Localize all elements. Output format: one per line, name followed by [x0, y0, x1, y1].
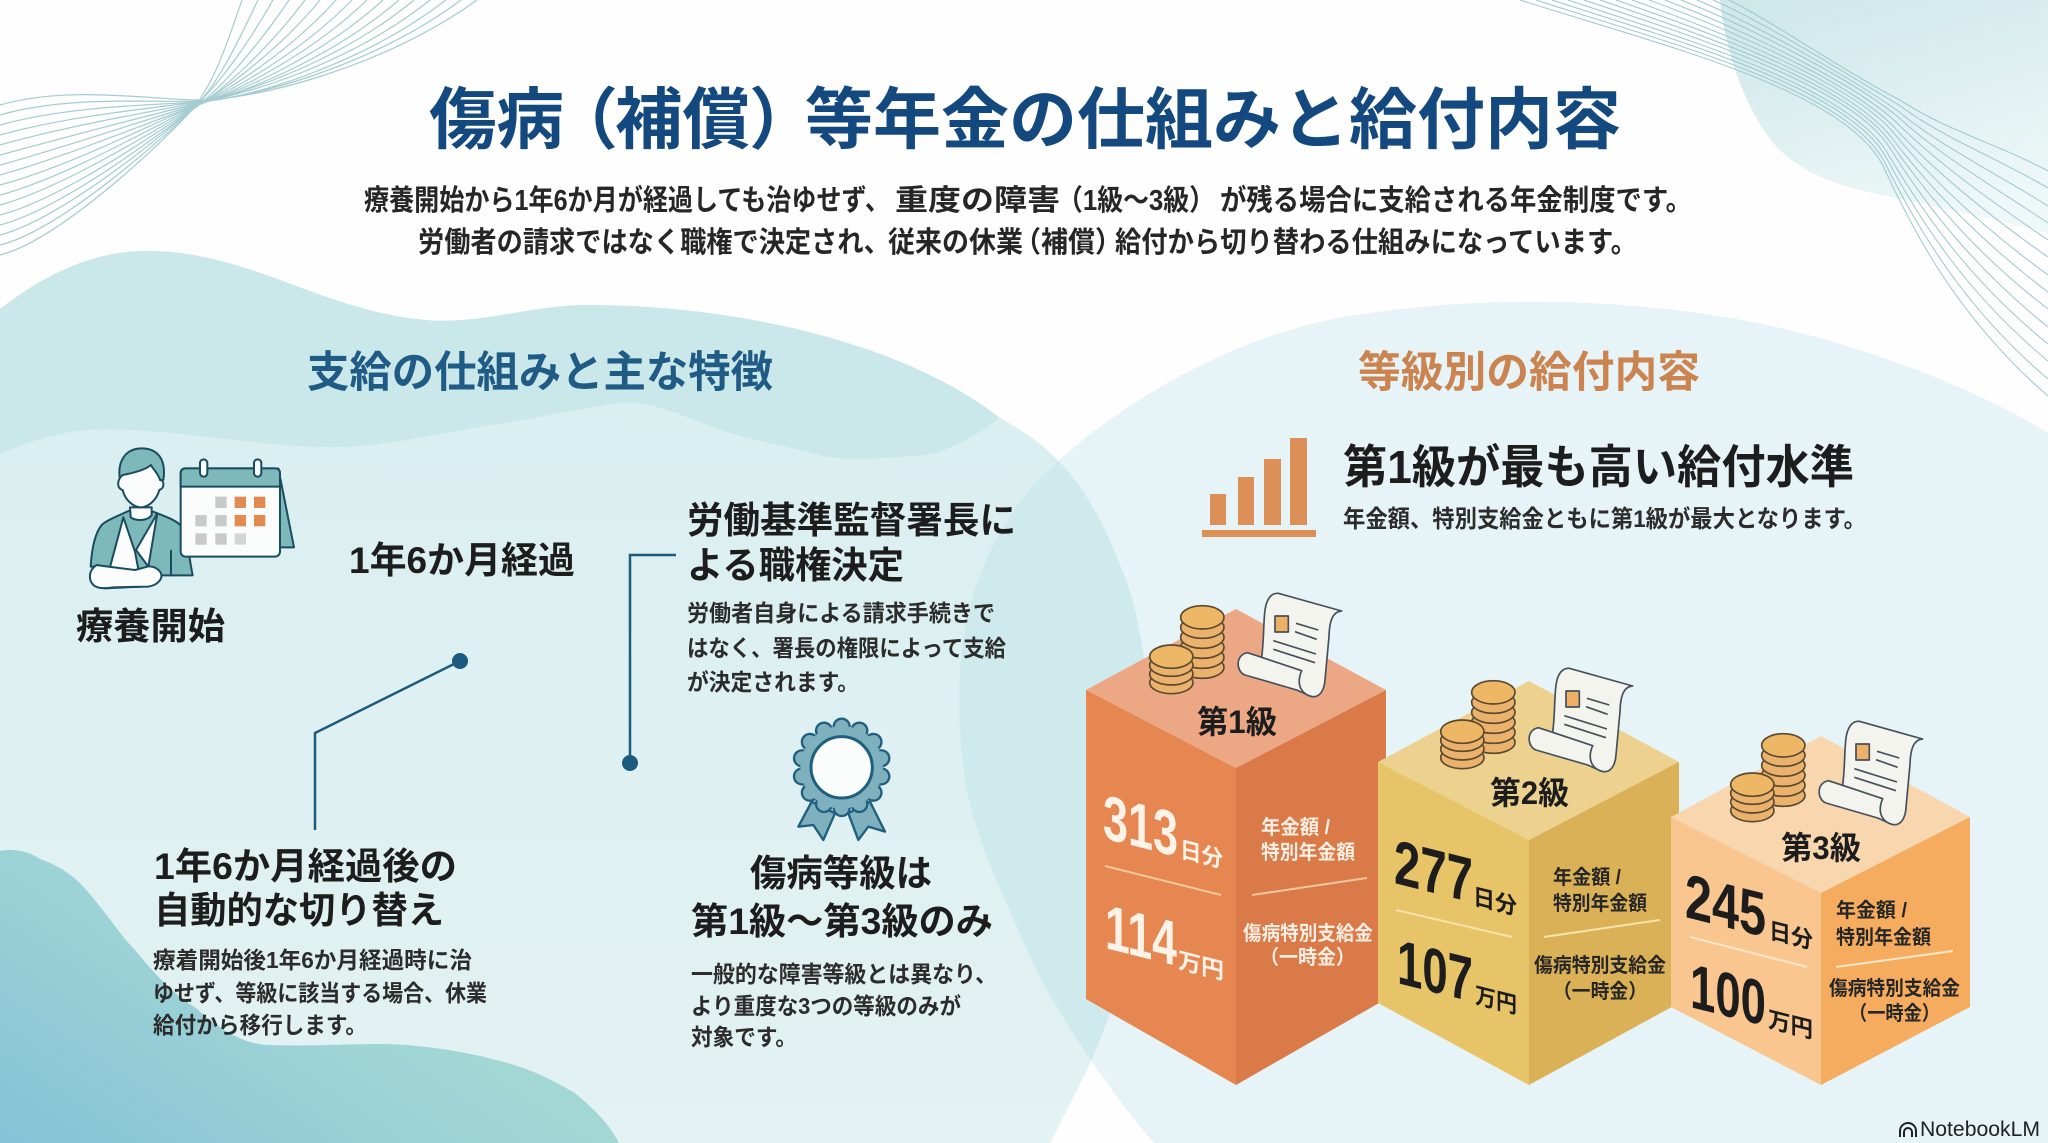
- text block: grades 1 to 3 only: 対象です。: [691, 1024, 797, 1050]
- title: 等年金の仕組みと給付内容: [805, 83, 1621, 158]
- block: grade 3: 第3級: [1781, 830, 1861, 866]
- block: grade 2: 277: [1394, 826, 1473, 917]
- block: grade 2: 年金額 /: [1553, 866, 1621, 889]
- block: grade 1: 第1級: [1197, 704, 1277, 740]
- text block: grades 1 to 3 only: 傷病等級は: [750, 853, 932, 894]
- block: grade 1: 日分: [1180, 836, 1224, 873]
- block: grade 3: 傷病特別支給金: [1829, 977, 1960, 1000]
- block: grade 1: 313: [1103, 781, 1178, 871]
- block: grade 3: 100: [1690, 950, 1766, 1040]
- intro text: 療養開始から1年6か月が経過しても治ゆせず、: [364, 183, 890, 217]
- block: grade 2: 第2級: [1490, 775, 1569, 811]
- intro text: （1級～3級）: [1057, 184, 1215, 217]
- icon: coins and document grade 2: [1441, 668, 1633, 772]
- label: 1 year 6 months elapsed: 1年6か月経過: [349, 540, 575, 581]
- text block: decision by chief of labour standards office: [687, 500, 1016, 695]
- icon: bar chart: [1202, 438, 1316, 537]
- text block: automatic switch: 1年6か月経過後の: [154, 846, 457, 887]
- block: grade 2: 日分: [1473, 883, 1518, 920]
- block: grade 1: 特別年金額: [1261, 841, 1355, 864]
- icon: award ribbon: [792, 719, 891, 840]
- label: start of treatment: 療養開始: [76, 606, 225, 647]
- block: grade 1: 年金額 /: [1261, 816, 1330, 839]
- icon: injured person with sling: [90, 448, 193, 588]
- block: grade 3: 万円: [1768, 1006, 1813, 1043]
- block: grade 2: 特別年金額: [1553, 892, 1647, 915]
- background: top-right wave lines: [1520, 0, 2048, 396]
- block: grade 3: 年金額 /: [1836, 899, 1907, 922]
- panel: right background circle: [959, 302, 2048, 1143]
- panel: upper darker wave band: [0, 251, 1000, 459]
- panel: overlap lens of left and right shapes: [960, 461, 1144, 1060]
- intro text: 重度の障害: [895, 184, 1060, 217]
- panel: left background shape: [0, 251, 1151, 1143]
- background: top-right teal shape: [1720, 0, 2048, 233]
- panel: lower-left teal shape: [0, 850, 619, 1143]
- intro text: が残る場合に支給される年金制度です。: [1220, 183, 1692, 217]
- block: grade 3: [1671, 721, 1970, 1085]
- icon: coins and document grade 3: [1731, 721, 1923, 825]
- text block: automatic switch: 給付から移行します。: [153, 1012, 367, 1038]
- connector: to automatic switch: [315, 653, 468, 830]
- intro text: 給付から切り替わる仕組みになっています。: [1115, 226, 1637, 259]
- logo: NotebookLM: NotebookLM: [1920, 1118, 2040, 1141]
- text block: decision by chief of labour standards office: が決定されます。: [687, 669, 859, 695]
- text block: automatic switch: ゆせず、等級に該当する場合、休業: [153, 980, 487, 1006]
- text block: automatic switch: 自動的な切り替え: [154, 890, 444, 931]
- block: grade 1: 傷病特別支給金: [1243, 922, 1373, 945]
- block: grade 2: （一時金）: [1553, 980, 1647, 1003]
- block: grade 2: 107: [1397, 926, 1473, 1016]
- block: grade 1: 114: [1105, 891, 1177, 980]
- title: ）: [749, 83, 816, 158]
- block: grade 1: [1086, 593, 1386, 1085]
- text block: grades 1 to 3 only: 第1級～第3級のみ: [691, 901, 993, 942]
- heading: left section: 支給の仕組みと主な特徴: [307, 349, 773, 397]
- block: grade 1: 万円: [1178, 947, 1224, 984]
- callout: grade 1 is highest: 年金額、特別支給金ともに第1級が最大となります。: [1343, 505, 1866, 533]
- text block: decision by chief of labour standards office: はなく、署長の権限によって支給: [687, 635, 1006, 661]
- title: 傷病: [429, 83, 564, 158]
- background: top-left wave lines: [0, 0, 477, 255]
- block: grade 3: 日分: [1769, 917, 1814, 954]
- title: [429, 83, 1621, 158]
- block: grade 2: 万円: [1475, 982, 1517, 1018]
- heading: right section: 等級別の給付内容: [1358, 349, 1700, 397]
- block: grade 1: （一時金）: [1260, 946, 1355, 969]
- block: grade 3: （一時金）: [1849, 1002, 1940, 1025]
- title: 補償: [615, 83, 750, 158]
- icon: coins and document grade 1: [1150, 593, 1342, 697]
- text block: automatic switch: 療着開始後1年6か月経過時に治: [153, 947, 472, 973]
- block: grade 2: 傷病特別支給金: [1534, 954, 1666, 977]
- icon: calendar: [181, 459, 294, 557]
- text block: decision by chief of labour standards office: 労働基準監督署長に: [687, 500, 1016, 541]
- text block: automatic switch: [153, 846, 487, 1038]
- intro text: （補償）: [1014, 226, 1122, 259]
- text block: grades 1 to 3 only: より重度な3つの等級のみが: [691, 993, 961, 1019]
- text block: grades 1 to 3 only: 一般的な障害等級とは異なり、: [691, 961, 997, 987]
- block: grade 3: 特別年金額: [1836, 926, 1931, 949]
- text block: decision by chief of labour standards office: 労働者自身による請求手続きで: [687, 600, 995, 626]
- callout: grade 1 is highest: [1343, 441, 1866, 533]
- callout: grade 1 is highest: 第1級が最も高い給付水準: [1343, 441, 1854, 493]
- intro text: 従来の休業: [888, 226, 1023, 259]
- block: grade 2: [1378, 668, 1679, 1085]
- connector: to chief decision: [622, 555, 676, 771]
- intro text: [364, 183, 1692, 259]
- block: grade 3: 245: [1685, 860, 1766, 951]
- title: （: [551, 83, 618, 158]
- text block: grades 1 to 3 only: [691, 853, 997, 1050]
- intro text: 労働者の請求ではなく職権で決定され、: [418, 226, 890, 259]
- text block: decision by chief of labour standards office: よる職権決定: [687, 545, 904, 586]
